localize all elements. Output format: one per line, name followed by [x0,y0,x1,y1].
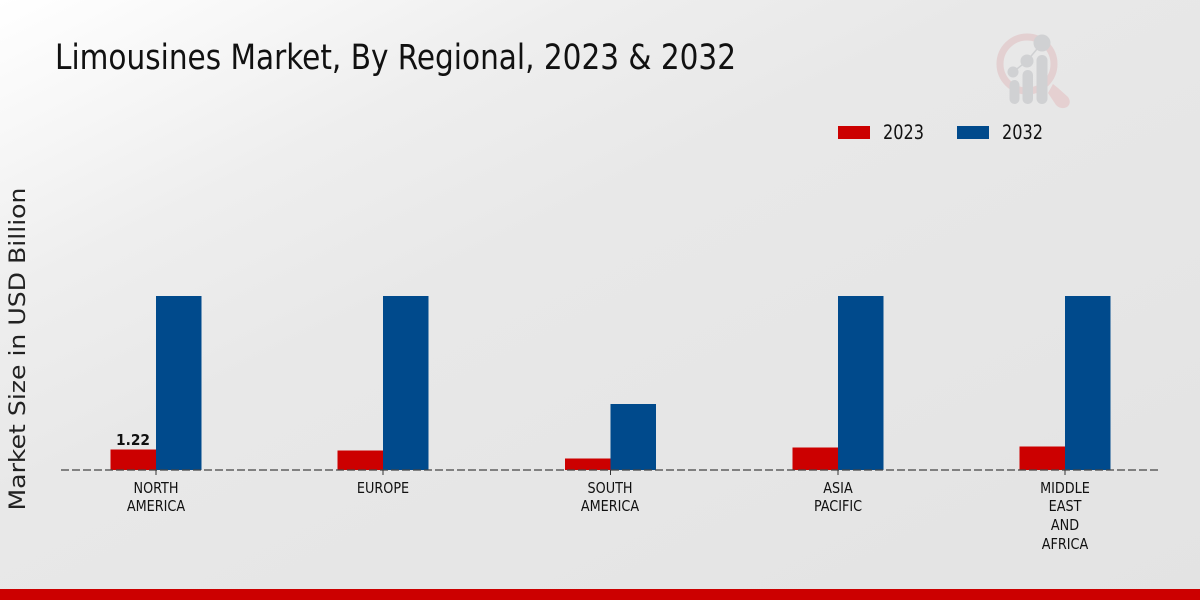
category label: North America: AMERICA [127,498,185,515]
bars: Europe [338,296,428,470]
category label: Europe: EUROPE [357,480,409,497]
category label: Middle East and Africa: AND [1051,517,1079,534]
bar chart [61,296,1159,553]
bars: Asia Pacific [792,296,884,470]
category label: North America: NORTH [134,480,178,497]
bars: Middle East and Africa [1020,296,1110,470]
legend: 2032 [1002,121,1043,144]
category label: South America: SOUTH [587,480,633,497]
category label: Middle East and Africa: EAST [1049,498,1082,515]
bars: North America [110,296,202,470]
category label: Middle East and Africa: AFRICA [1042,536,1088,553]
category label: Asia Pacific: PACIFIC [814,498,862,515]
title: Limousines Market, By Regional, 2023 & 2032 [55,38,736,78]
y axis label: Market Size in USD Billion [5,188,31,510]
legend [838,121,1043,144]
value label: 1.22: 1.22 [116,431,150,449]
category label: Middle East and Africa: MIDDLE [1040,480,1090,497]
bars: South America [565,404,656,470]
footer bar [0,589,1200,600]
category label: South America: AMERICA [581,498,639,515]
legend: 2023 [883,121,924,144]
category label: Asia Pacific: ASIA [823,480,853,497]
icon: watermark logo [1000,34,1070,108]
